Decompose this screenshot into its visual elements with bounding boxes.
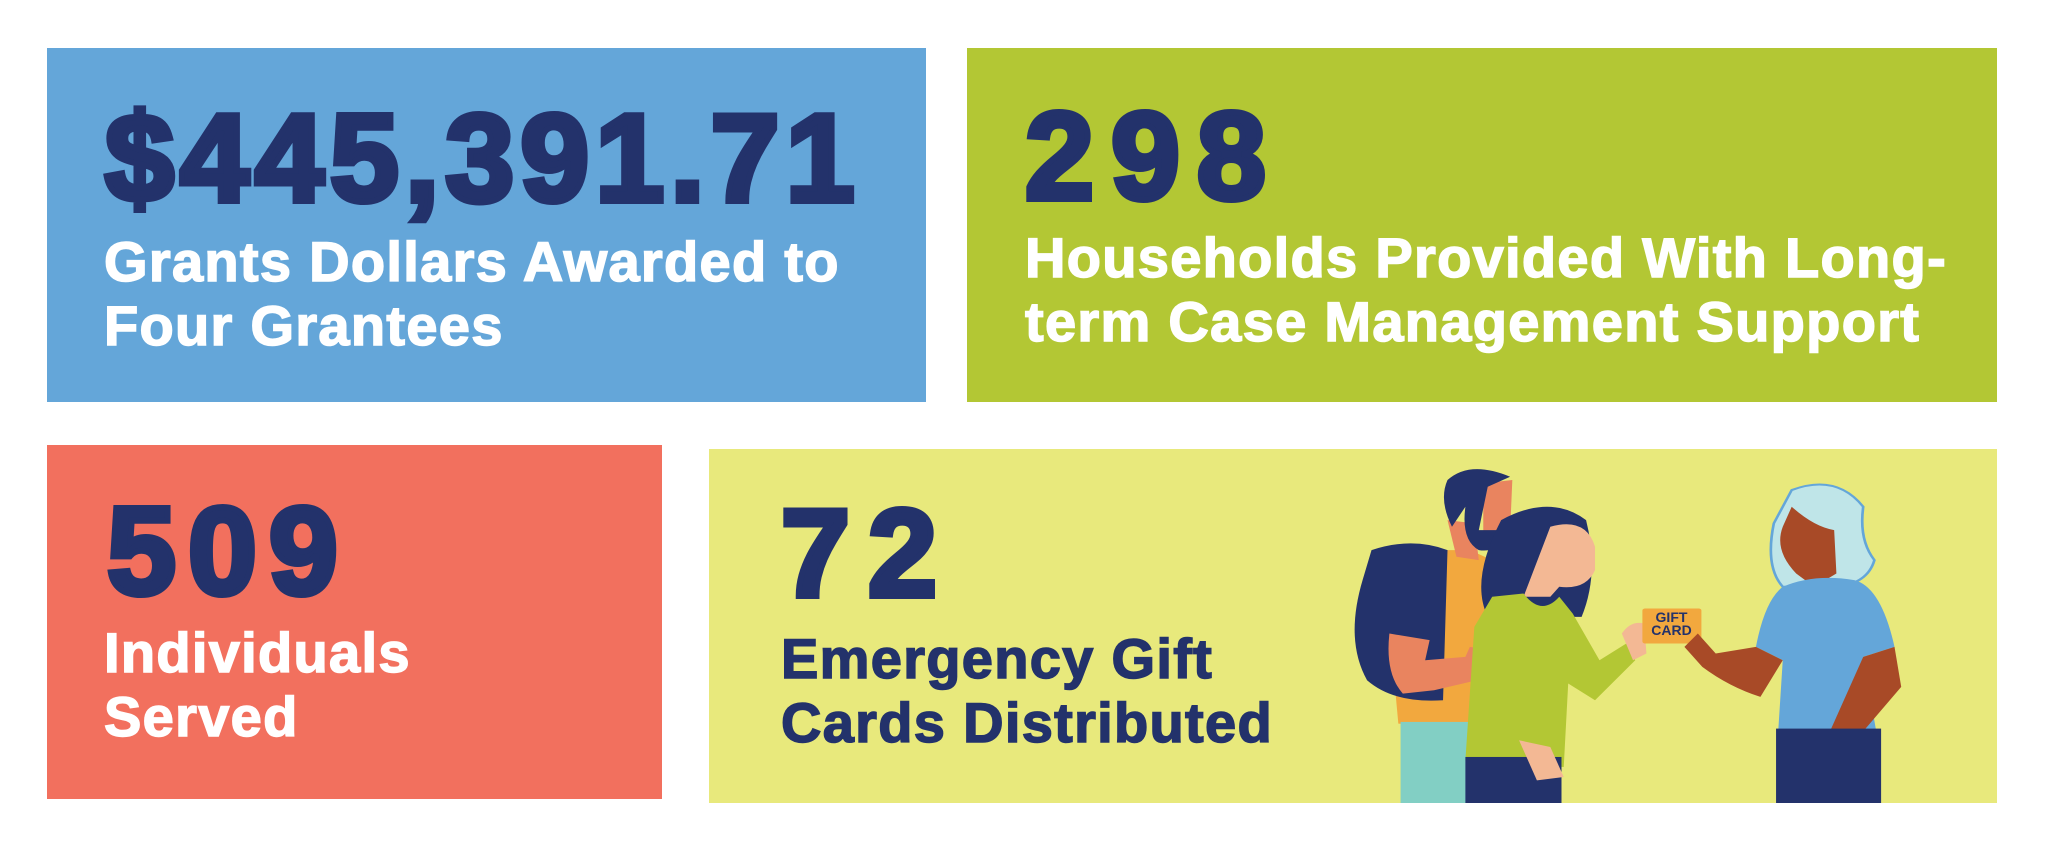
label: individuals — [104, 621, 411, 748]
label: gift cards — [781, 627, 1273, 754]
illustration: people exchanging gift card — [1354, 469, 1902, 803]
woman in green — [1465, 507, 1646, 803]
label: households: term Case Management Support — [1025, 290, 1920, 353]
label: individuals: Served — [104, 685, 299, 748]
label: households: Households Provided With Long- — [1025, 226, 1947, 289]
gift card text: GIFT — [1656, 609, 1687, 625]
number: 72: 72 — [781, 485, 955, 623]
panel: individuals — [47, 445, 662, 799]
label: grants: Four Grantees — [104, 294, 504, 357]
label: grants: Grants Dollars Awarded to — [104, 230, 840, 293]
number: 298: 298 — [1025, 88, 1283, 226]
man — [1355, 469, 1512, 803]
gift card text — [1651, 609, 1692, 638]
gift card — [1642, 608, 1701, 644]
panel: gift cards — [709, 449, 1997, 803]
label: households — [1024, 226, 1947, 354]
label: individuals: Individuals — [104, 621, 411, 684]
older woman — [1684, 484, 1901, 803]
number: 509: 509 — [107, 483, 350, 621]
panel: grants dollars — [47, 48, 926, 402]
gift card text: CARD — [1651, 622, 1692, 638]
number: $445,391.71: $445,391.71 — [105, 90, 861, 228]
label: gift cards: Emergency Gift — [781, 627, 1213, 690]
label: gift cards: Cards Distributed — [781, 691, 1273, 754]
panel: households — [967, 48, 1997, 402]
label: grants — [104, 230, 840, 357]
